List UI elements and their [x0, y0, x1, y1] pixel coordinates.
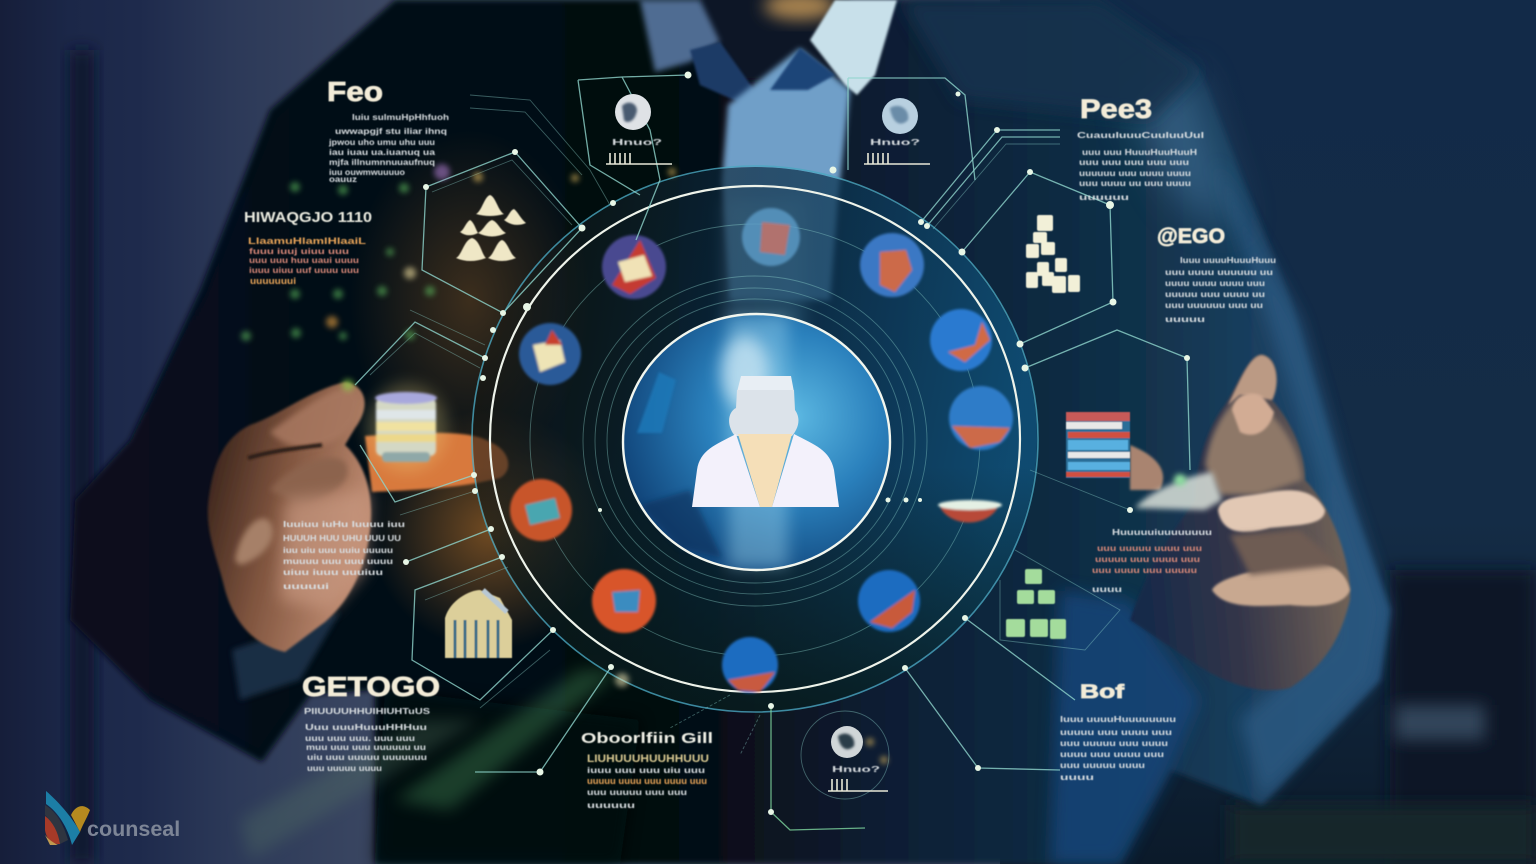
logo: counseal: counseal	[87, 817, 180, 841]
icon: globe bottom: Hnuo?	[832, 765, 880, 774]
text block: right: uuu uuuuuu uuu uu	[1165, 301, 1263, 310]
text block: bottom centre: Oboorlfiin Gill	[581, 730, 713, 747]
node 7	[858, 570, 920, 632]
icon: globe top right	[864, 98, 930, 164]
text block: left: uuuuuuui	[250, 276, 296, 286]
text block: left	[244, 209, 372, 286]
text block: bottom centre: uuu uuuuu uuu uuu	[587, 788, 687, 797]
text block: bottom left: PIIUUUUHHUIHIUHTuUS	[304, 707, 431, 716]
text block: left over hand: HUUUH HUU UHU UUU UU	[283, 534, 401, 543]
icon: white cubes	[1026, 215, 1080, 293]
text block: bottom right: uuuu	[1060, 773, 1094, 782]
text block: left over hand: muuuu uuu uuu uuuu	[283, 557, 393, 566]
icon: stacked bowls	[456, 195, 526, 261]
text block: bottom centre: uuuuuu	[587, 801, 635, 810]
node 2	[742, 208, 800, 266]
text block: bottom centre	[581, 730, 713, 810]
text block: left: fuuu iuuj uiuu uuu	[249, 247, 349, 256]
text block: right: @EGO	[1157, 225, 1225, 248]
text block: bottom right	[1060, 682, 1176, 782]
text block: left: uuu uuu huu uaui uuuu	[249, 256, 359, 265]
green bokeh lights	[241, 164, 888, 764]
text block: bottom centre: uuuuu uuuu uuu uuuu uuu	[587, 776, 707, 786]
text block: bottom left: GETOGO	[302, 671, 440, 702]
node 3	[860, 233, 924, 297]
text block: right lower: uuuuu uuu uuuu uuu	[1095, 555, 1200, 564]
text block: left over hand	[283, 520, 405, 591]
text block: left over hand: uuuuui	[283, 582, 329, 591]
icon: globe top left: Hnuo?	[612, 138, 662, 147]
text block: left: HIWAQGJO 1110	[244, 209, 372, 226]
text block: left over hand: iuu uiu uuu uuiu uuuuu	[283, 546, 393, 555]
text block: top left: iau iuau ua.iuanuq ua	[329, 148, 436, 157]
icon: red server building	[1066, 412, 1130, 478]
left hand	[208, 382, 508, 652]
text block: bottom centre: LIUHUUUHUUHHUUU	[587, 753, 709, 765]
logo: counseal	[45, 791, 180, 845]
text block: left over hand: Iuuiuu iuHu Iuuuu iuu	[283, 520, 405, 529]
text block: top left: mjfa illnumnnuuaufnuq	[329, 158, 435, 167]
text block: top left: uwwapgjf stu iliar ihnq	[335, 127, 447, 136]
node 1	[602, 235, 666, 299]
node 10	[510, 479, 572, 541]
node 8	[722, 637, 778, 693]
text block: top left: iuu ouwmwuuuuo	[329, 168, 405, 177]
text block: top left: Iuiu sulmuHpHhfuoh	[352, 113, 449, 122]
text block: right: uuu uuuu uuuuuu uu	[1165, 268, 1273, 277]
text block: bottom right: uuu uuuuu uuu uuuu	[1060, 739, 1168, 748]
text block: top right: uuu uuu HuuuHuuHuuH	[1082, 148, 1197, 157]
text block: bottom left: muu uuu uuu uuuuuu uu	[306, 743, 426, 752]
text block: left: LlaamuHlamlHlaaiL	[248, 236, 367, 246]
ambient glows	[240, 130, 620, 860]
text block: bottom left: Uuu uuuHuuuHHHuu	[305, 723, 427, 732]
text block: bottom left	[302, 671, 440, 773]
shirt and tie	[640, 0, 897, 390]
central circular hub	[472, 166, 1038, 712]
text block: right lower	[1092, 528, 1212, 594]
logo mark	[45, 791, 90, 845]
text block: right: uuuuu uuu uuuu uu	[1165, 290, 1265, 299]
node 9	[592, 569, 656, 633]
node 4	[930, 309, 992, 371]
text block: bottom left: uiu uuu uuuuu uuuuuuu	[307, 753, 427, 762]
text block: top right: Pee3	[1080, 94, 1152, 124]
inner blue disc	[623, 314, 890, 570]
text block: top right: uuu uuu uuu uuu uuu	[1079, 158, 1189, 167]
text block: right: Iuuu uuuuHuuuHuuu	[1180, 256, 1276, 265]
icon: pillared building	[445, 590, 512, 658]
text block: right lower: uuu uuuu uuu uuuuu	[1092, 566, 1197, 575]
text block: bottom left: uuu uuu uuu. uuu uuu	[305, 734, 415, 743]
text block: bottom right: uuu uuuuu uuuu	[1060, 761, 1145, 770]
text block: right lower: uuu uuuuu uuuu uuu	[1097, 544, 1202, 553]
icon: glowing database	[367, 384, 447, 472]
text block: top right: uuuuuu uuu uuuu uuuu	[1079, 169, 1191, 178]
circuit lines	[355, 75, 1190, 830]
text block: bottom right: uuuu uuu uuuu uuu	[1060, 750, 1164, 759]
text block: top left: oauuz	[329, 175, 357, 184]
text block: top right: CuauuIuuuCuuIuuUuI	[1077, 131, 1204, 140]
text block: top left: jpwou uho umu uhu uuu	[328, 138, 435, 147]
text block: right lower: Huuuuuiuuuuuuuu	[1112, 528, 1212, 537]
text block: top left	[327, 76, 449, 184]
text block: left: iuuu uiuu uuf uuuu uuu	[249, 266, 359, 275]
text block: top left: Feo	[327, 76, 383, 107]
text block: bottom right: Iuuu uuuuHuuuuuuuu	[1060, 715, 1176, 724]
right hand	[1130, 355, 1350, 690]
text block: bottom right: uuuuu uuu uuuu uuu	[1060, 728, 1172, 737]
text block: bottom right: Bof	[1080, 682, 1125, 703]
text block: top right: uuuuuu	[1079, 193, 1129, 202]
text block: top right	[1077, 94, 1204, 202]
text block: right	[1157, 225, 1276, 324]
icon: globe top left	[606, 94, 672, 164]
node 5	[949, 386, 1013, 450]
outer glass dial	[473, 167, 1037, 711]
glowing dots	[403, 72, 1190, 815]
icon: globe top right: Hnuo?	[870, 138, 920, 147]
node 11	[519, 323, 581, 385]
node 6	[938, 500, 1002, 523]
text block: right: uuuu uuuu uuuu uuu	[1165, 279, 1265, 288]
text block: right lower: uuuu	[1092, 585, 1122, 594]
text block: bottom left: uuu uuuuu uuuu	[307, 764, 382, 773]
text block: top right: uuu uuuu uu uuu uuuu	[1079, 179, 1191, 188]
icon: green cubes	[1006, 569, 1066, 639]
text block: right: uuuuu	[1165, 315, 1205, 324]
ring nodes	[510, 208, 1013, 693]
text block: bottom centre: iuuu uuu uuu uiu uuu	[587, 766, 705, 775]
icon: globe bottom	[828, 726, 888, 791]
icon: person in white coat	[692, 376, 839, 507]
text block: left over hand: uiuu iuuu uuuiuu	[283, 568, 383, 577]
